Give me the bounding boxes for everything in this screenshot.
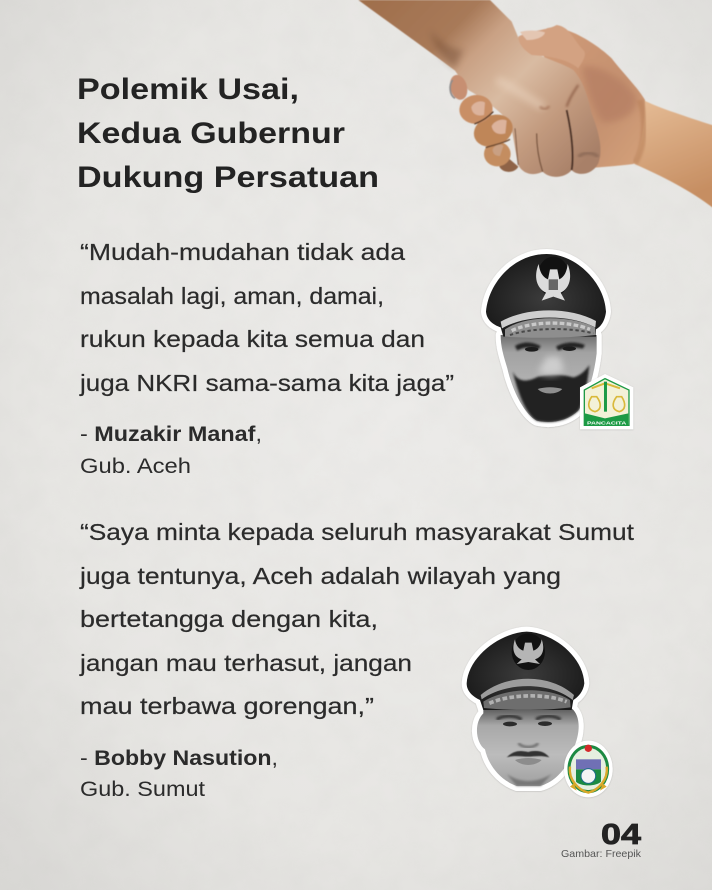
knuckle separators and highlights <box>567 110 573 170</box>
white sticker outline <box>486 254 606 422</box>
face <box>477 708 579 786</box>
attribution: Bobby Nasution: Gub. Sumut <box>80 778 205 801</box>
illustration: handshake <box>358 0 712 209</box>
title: Dukung Persatuan <box>77 161 379 194</box>
quote: Muzakir Manaf <box>79 239 454 396</box>
right palm <box>540 28 645 168</box>
quote: Bobby Nasution <box>79 519 635 719</box>
page number: 04 <box>601 819 641 851</box>
white sticker outline <box>467 632 584 786</box>
cap band <box>501 310 596 328</box>
right forearm <box>633 99 712 209</box>
mouth <box>515 758 542 765</box>
eyes and brows <box>515 342 541 351</box>
emblem: Aceh: PANCACITA <box>587 420 628 425</box>
attribution: Muzakir Manaf <box>80 423 262 478</box>
quote: Bobby Nasution: “Saya minta kepada seluruh masyarakat Sumut <box>80 519 635 545</box>
left forearm and back of hand <box>358 0 601 177</box>
chin beard <box>507 774 552 786</box>
quote: Bobby Nasution: juga tentunya, Aceh adalah wilayah yang <box>79 563 561 589</box>
quote: Bobby Nasution: jangan mau terhasut, jangan <box>79 650 412 676</box>
thumb <box>518 25 585 68</box>
moustache <box>507 751 549 757</box>
title: Polemik Usai, <box>77 73 299 106</box>
right hand fingers wrapping the clasp <box>447 73 518 172</box>
braid on visor <box>483 690 571 710</box>
quote: Bobby Nasution: bertetangga dengan kita, <box>80 606 378 632</box>
attribution: Bobby Nasution: - Bobby Nasution , <box>80 747 278 770</box>
eyes and brows <box>497 716 522 719</box>
image credit: Gambar: Freepik <box>561 848 642 860</box>
cap <box>467 632 584 710</box>
cap badge: garuda <box>512 633 545 670</box>
quote: Muzakir Manaf: rukun kepada kita semua dan <box>80 326 425 352</box>
emblem: Aceh <box>580 374 633 429</box>
face <box>501 335 597 422</box>
attribution: Muzakir Manaf: Gub. Aceh <box>80 455 191 478</box>
quote: Muzakir Manaf: masalah lagi, aman, damai, <box>80 283 384 309</box>
cap badge: garuda <box>536 257 570 301</box>
emblem: Sumatera Utara <box>564 741 613 797</box>
title <box>77 73 379 194</box>
cap <box>486 254 606 337</box>
attribution: Bobby Nasution <box>80 747 278 801</box>
attribution: Muzakir Manaf: - Muzakir Manaf , <box>80 423 262 446</box>
portrait: Muzakir Manaf <box>486 254 633 429</box>
quote: Muzakir Manaf: “Mudah-mudahan tidak ada <box>80 239 405 265</box>
quote: Muzakir Manaf: juga NKRI sama-sama kita jaga” <box>79 370 454 396</box>
quote: Bobby Nasution: mau terbawa gorengan,” <box>80 693 374 719</box>
braid on visor <box>505 318 596 338</box>
beard <box>513 365 589 422</box>
cap band <box>481 679 574 700</box>
title: Kedua Gubernur <box>77 117 345 150</box>
portrait: Bobby Nasution <box>467 632 613 797</box>
